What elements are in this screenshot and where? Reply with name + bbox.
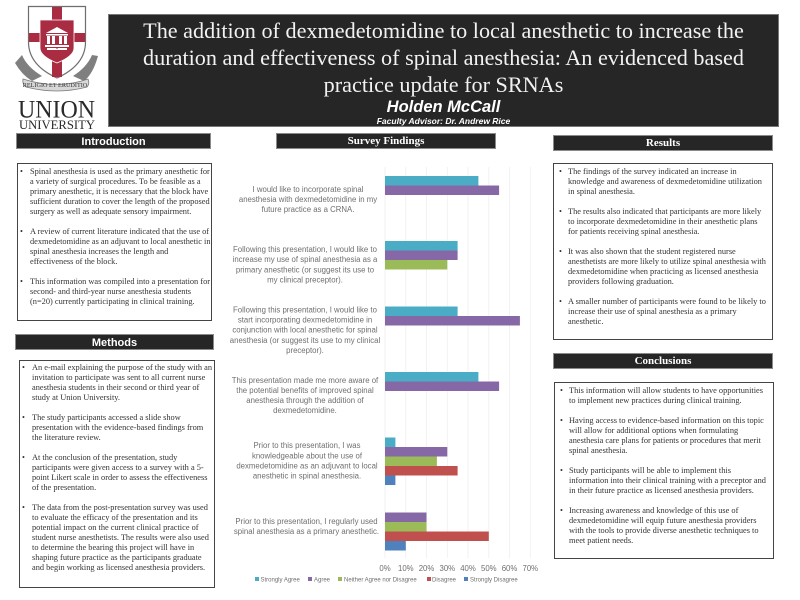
text: spinal anesthesia <box>30 167 210 216</box>
category labels: anesthetic in spinal anesthesia. <box>253 472 361 480</box>
category labels: the potential benefits of improved spinal <box>236 386 374 395</box>
text: literature review: effectiveness of the block. <box>30 257 117 266</box>
bullet: • <box>559 207 562 216</box>
logo wordmark: UNION <box>18 96 95 124</box>
bars: increase use of spinal anesthesia <box>385 241 458 270</box>
text: data: The data from the post-presentation survey was used <box>32 503 208 512</box>
heading: Conclusions <box>553 353 773 369</box>
text: implementation: Study participants will be able to implement this <box>569 466 731 475</box>
title <box>143 18 744 97</box>
text: spinal anesthesia: Spinal anesthesia is used as the primary anesthetic for <box>30 167 210 176</box>
text: literature review: A review of current literature indicated that the use of <box>30 227 209 236</box>
x axis labels: 30% <box>439 564 455 573</box>
text: presentation: (n=20) currently participating in clinical training. <box>30 297 195 306</box>
bullet: • <box>22 453 25 462</box>
text: e-mail: study at Union University. <box>32 393 120 402</box>
text: student nurses: dexmedetomidine when practicing as licensed anesthesia <box>568 267 758 276</box>
category labels: Prior to this presentation, I regularly used <box>235 517 378 526</box>
category labels: preceptor). <box>286 346 324 355</box>
logo wordmark: UNIVERSITY <box>19 118 95 132</box>
text: e-mail: invitation to participate was sent to all current nurse <box>32 373 205 382</box>
text: data: shaping future practice as the participants graduate <box>32 553 202 562</box>
bullet: • <box>20 227 23 236</box>
x axis labels <box>379 564 538 573</box>
text: data: to determine the bearing this project will have in <box>32 543 194 552</box>
text: data: student nurse anesthetists. The results were also used <box>32 533 209 542</box>
bullet: • <box>22 363 25 372</box>
bars: incorporate spinal anesthesia with dexmedetomidine <box>385 176 499 195</box>
text: findings <box>568 167 762 196</box>
x axis labels: 60% <box>502 564 517 573</box>
text: student nurses: It was also shown that the student registered nurse <box>568 247 736 256</box>
category labels: I would like to incorporate spinal <box>253 185 364 194</box>
text: likelihood <box>568 207 762 236</box>
text: slide show: the literature review. <box>32 433 101 442</box>
text: student nurses: providers following graduation. <box>568 277 674 286</box>
category labels: anesthesia with dexmedetomidine in my <box>239 195 377 204</box>
text: findings: knowledge and awareness of dexmedetomidine utilization <box>568 177 762 186</box>
title: duration and effectiveness of spinal anesthesia: An evidenced based <box>143 45 744 70</box>
legend: Strongly Disagree <box>470 578 518 584</box>
bullet: • <box>22 413 25 422</box>
heading: Methods: Methods <box>92 337 137 349</box>
text: smaller number: A smaller number of participants were found to be likely to <box>568 297 766 306</box>
bars: start incorporating dexmedetomidine <box>385 306 520 326</box>
bars: regularly used spinal anesthesia <box>385 512 489 550</box>
bullet: • <box>559 297 562 306</box>
heading: Survey Findings: Survey Findings <box>348 135 424 147</box>
text: opportunities <box>569 386 763 405</box>
text: implementation: information into their clinical training with a preceptor and <box>569 476 766 485</box>
category labels: anesthesia (or suggest its use to my clinical <box>230 336 380 345</box>
category labels: knowledgeable about the use of <box>252 452 363 460</box>
x axis labels: 50% <box>481 564 497 573</box>
text: findings: in spinal anesthesia. <box>568 187 635 196</box>
text: student nurses <box>568 247 766 286</box>
category labels: Following this presentation, I would like to <box>233 245 378 254</box>
text: slide show: The study participants accessed a slide show <box>32 413 181 422</box>
legend <box>255 577 518 584</box>
text: spinal anesthesia: a variety of surgical procedures. To be feasible as a <box>30 177 201 186</box>
text: literature review: dexmedetomidine as an adjuvant to local anesthetic in <box>30 237 210 246</box>
heading: Introduction: Introduction <box>81 136 146 148</box>
text: data: to evaluate the efficacy of the presentation and its <box>32 513 198 522</box>
text: likelihood: for patients receiving spinal anesthesia. <box>568 227 699 236</box>
text: evidence access: will allow for additional options when formulating <box>569 426 738 435</box>
legend: Disagree <box>432 578 457 584</box>
text: literature review <box>30 227 210 266</box>
faculty advisor: Faculty Advisor: Dr. Andrew Rice <box>377 116 510 126</box>
text: survey: of the presentation. <box>32 483 96 492</box>
x axis labels: 20% <box>419 564 434 573</box>
text: e-mail <box>32 363 212 402</box>
text: spinal anesthesia: primary anesthetic, it is necessary that the block have <box>30 187 208 196</box>
category labels: anesthesia through the addition of <box>246 396 365 405</box>
category labels: start incorporating dexmedetomidine in <box>238 316 372 324</box>
bullet: • <box>20 167 23 176</box>
bullet: • <box>559 247 562 256</box>
panel: results <box>553 163 773 340</box>
text: spinal anesthesia: surgery as well as adequate sensory impairment. <box>30 207 191 216</box>
x axis labels: 40% <box>460 564 476 573</box>
text: slide show <box>32 413 204 442</box>
text: survey: point Likert scale in order to assess the effectiveness <box>32 473 207 482</box>
text: data <box>32 503 209 572</box>
logo: Union University <box>15 6 98 132</box>
category labels: dexmedetomidine as an adjuvant to local <box>236 462 378 470</box>
icon: shield <box>28 6 86 78</box>
heading: Methods <box>15 334 214 350</box>
legend: Strongly Agree <box>260 578 301 584</box>
text: evidence access: Having access to evidence-based information on this topic <box>569 416 764 425</box>
text: e-mail: anesthesia students in their second or third year of <box>32 383 199 392</box>
text: findings: The findings of the survey indicated an increase in <box>568 167 737 176</box>
heading: Conclusions: Conclusions <box>635 355 691 367</box>
heading: Results <box>553 135 773 151</box>
panel: conclusions <box>554 382 774 559</box>
text: evidence access <box>569 416 764 455</box>
title banner <box>108 14 779 127</box>
text: awareness: meet patient needs. <box>569 536 633 545</box>
text: smaller number <box>568 297 766 326</box>
bullet: • <box>20 277 23 286</box>
text: evidence access: spinal anesthesia. <box>569 446 627 455</box>
title: practice update for SRNAs <box>324 72 563 97</box>
x axis labels: 0% <box>379 564 391 573</box>
bars: prior knowledge <box>385 438 458 485</box>
category labels: Following this presentation, I would like to <box>233 306 378 314</box>
category labels: spinal anesthesia as a primary anesthetic. <box>234 527 379 536</box>
author: Holden McCall <box>387 98 500 116</box>
text: implementation: in their future practice as licensed anesthesia providers. <box>569 486 754 495</box>
text: presentation <box>30 277 210 306</box>
text: survey: At the conclusion of the presentation, study <box>32 453 177 462</box>
text: presentation: This information was compiled into a presentation for <box>30 277 210 286</box>
heading: Survey Findings <box>276 133 496 149</box>
text: literature review: spinal anesthesia increases the length and <box>30 247 168 256</box>
text: spinal anesthesia: sufficient duration to cover the length of the proposed <box>30 197 210 206</box>
category labels: increase my use of spinal anesthesia as a <box>233 255 378 264</box>
text: implementation <box>569 466 766 495</box>
legend: Agree <box>314 578 331 584</box>
bar chart: survey findings <box>230 167 538 584</box>
category labels: primary anesthetic (or suggest its use to <box>236 266 375 274</box>
bullet: • <box>560 386 563 395</box>
title: The addition of dexmedetomidine to local anesthetic to increase the <box>143 18 744 43</box>
bars: more aware of benefits <box>385 372 499 391</box>
heading: Results: Results <box>646 137 680 149</box>
category labels: my clinical preceptor). <box>267 276 343 284</box>
panel: methods <box>19 360 215 588</box>
panel: introduction <box>17 163 212 321</box>
x axis labels: 70% <box>522 564 538 573</box>
bullet: • <box>559 167 562 176</box>
text: data: and begin working as licensed anesthesia providers. <box>32 563 205 572</box>
text: smaller number: increase their use of spinal anesthesia as a primary <box>568 307 737 316</box>
text: smaller number: anesthetic. <box>568 317 603 326</box>
text: data: potential impact on the current clinical practice of <box>32 523 199 532</box>
heading: Introduction <box>16 133 211 149</box>
bullet: • <box>22 503 25 512</box>
text: student nurses: anesthetists are more likely to utilize spinal anesthesia with <box>568 257 766 266</box>
text: awareness: dexmedetomidine will equip future anesthesia providers <box>569 516 756 525</box>
category labels: conjunction with local anesthetic for spinal <box>232 326 378 334</box>
text: likelihood: The results also indicated that participants are more likely <box>568 207 761 216</box>
text: survey <box>32 453 208 492</box>
text: awareness <box>569 506 759 545</box>
category labels: This presentation made me more aware of <box>232 376 379 385</box>
text: slide show: presentation with the evidence-based findings from <box>32 423 203 432</box>
category labels <box>230 185 380 536</box>
icon: ribbon: RELIGIO ET ERUDITIO <box>23 82 88 89</box>
category labels: Prior to this presentation, I was <box>253 441 361 450</box>
text: awareness: with the tools to provide diverse anesthetic techniques to <box>569 526 759 535</box>
text: evidence access: anesthesia care plans for patients or procedures that merit <box>569 436 761 445</box>
x axis labels: 10% <box>398 564 414 573</box>
bullet: • <box>560 506 563 515</box>
text: opportunities: This information will allow students to have opportunities <box>569 386 763 395</box>
category labels: dexmedetomidine. <box>273 406 337 415</box>
text: survey: participants were given access to a survey with a 5- <box>32 463 204 472</box>
text: awareness: Increasing awareness and knowledge of this use of <box>569 506 738 515</box>
text: e-mail: An e-mail explaining the purpose of the study with an <box>32 363 212 372</box>
bullet: • <box>560 466 563 475</box>
text: opportunities: to implement new practices during clinical training. <box>569 396 742 405</box>
legend: Neither Agree nor Disagree <box>344 578 417 584</box>
text: likelihood: to incorporate dexmedetomidine in their anesthetic plans <box>568 217 758 226</box>
text: presentation: second- and third-year nurse anesthesia students <box>30 287 191 296</box>
bullet: • <box>560 416 563 425</box>
category labels: future practice as a CRNA. <box>262 205 354 214</box>
